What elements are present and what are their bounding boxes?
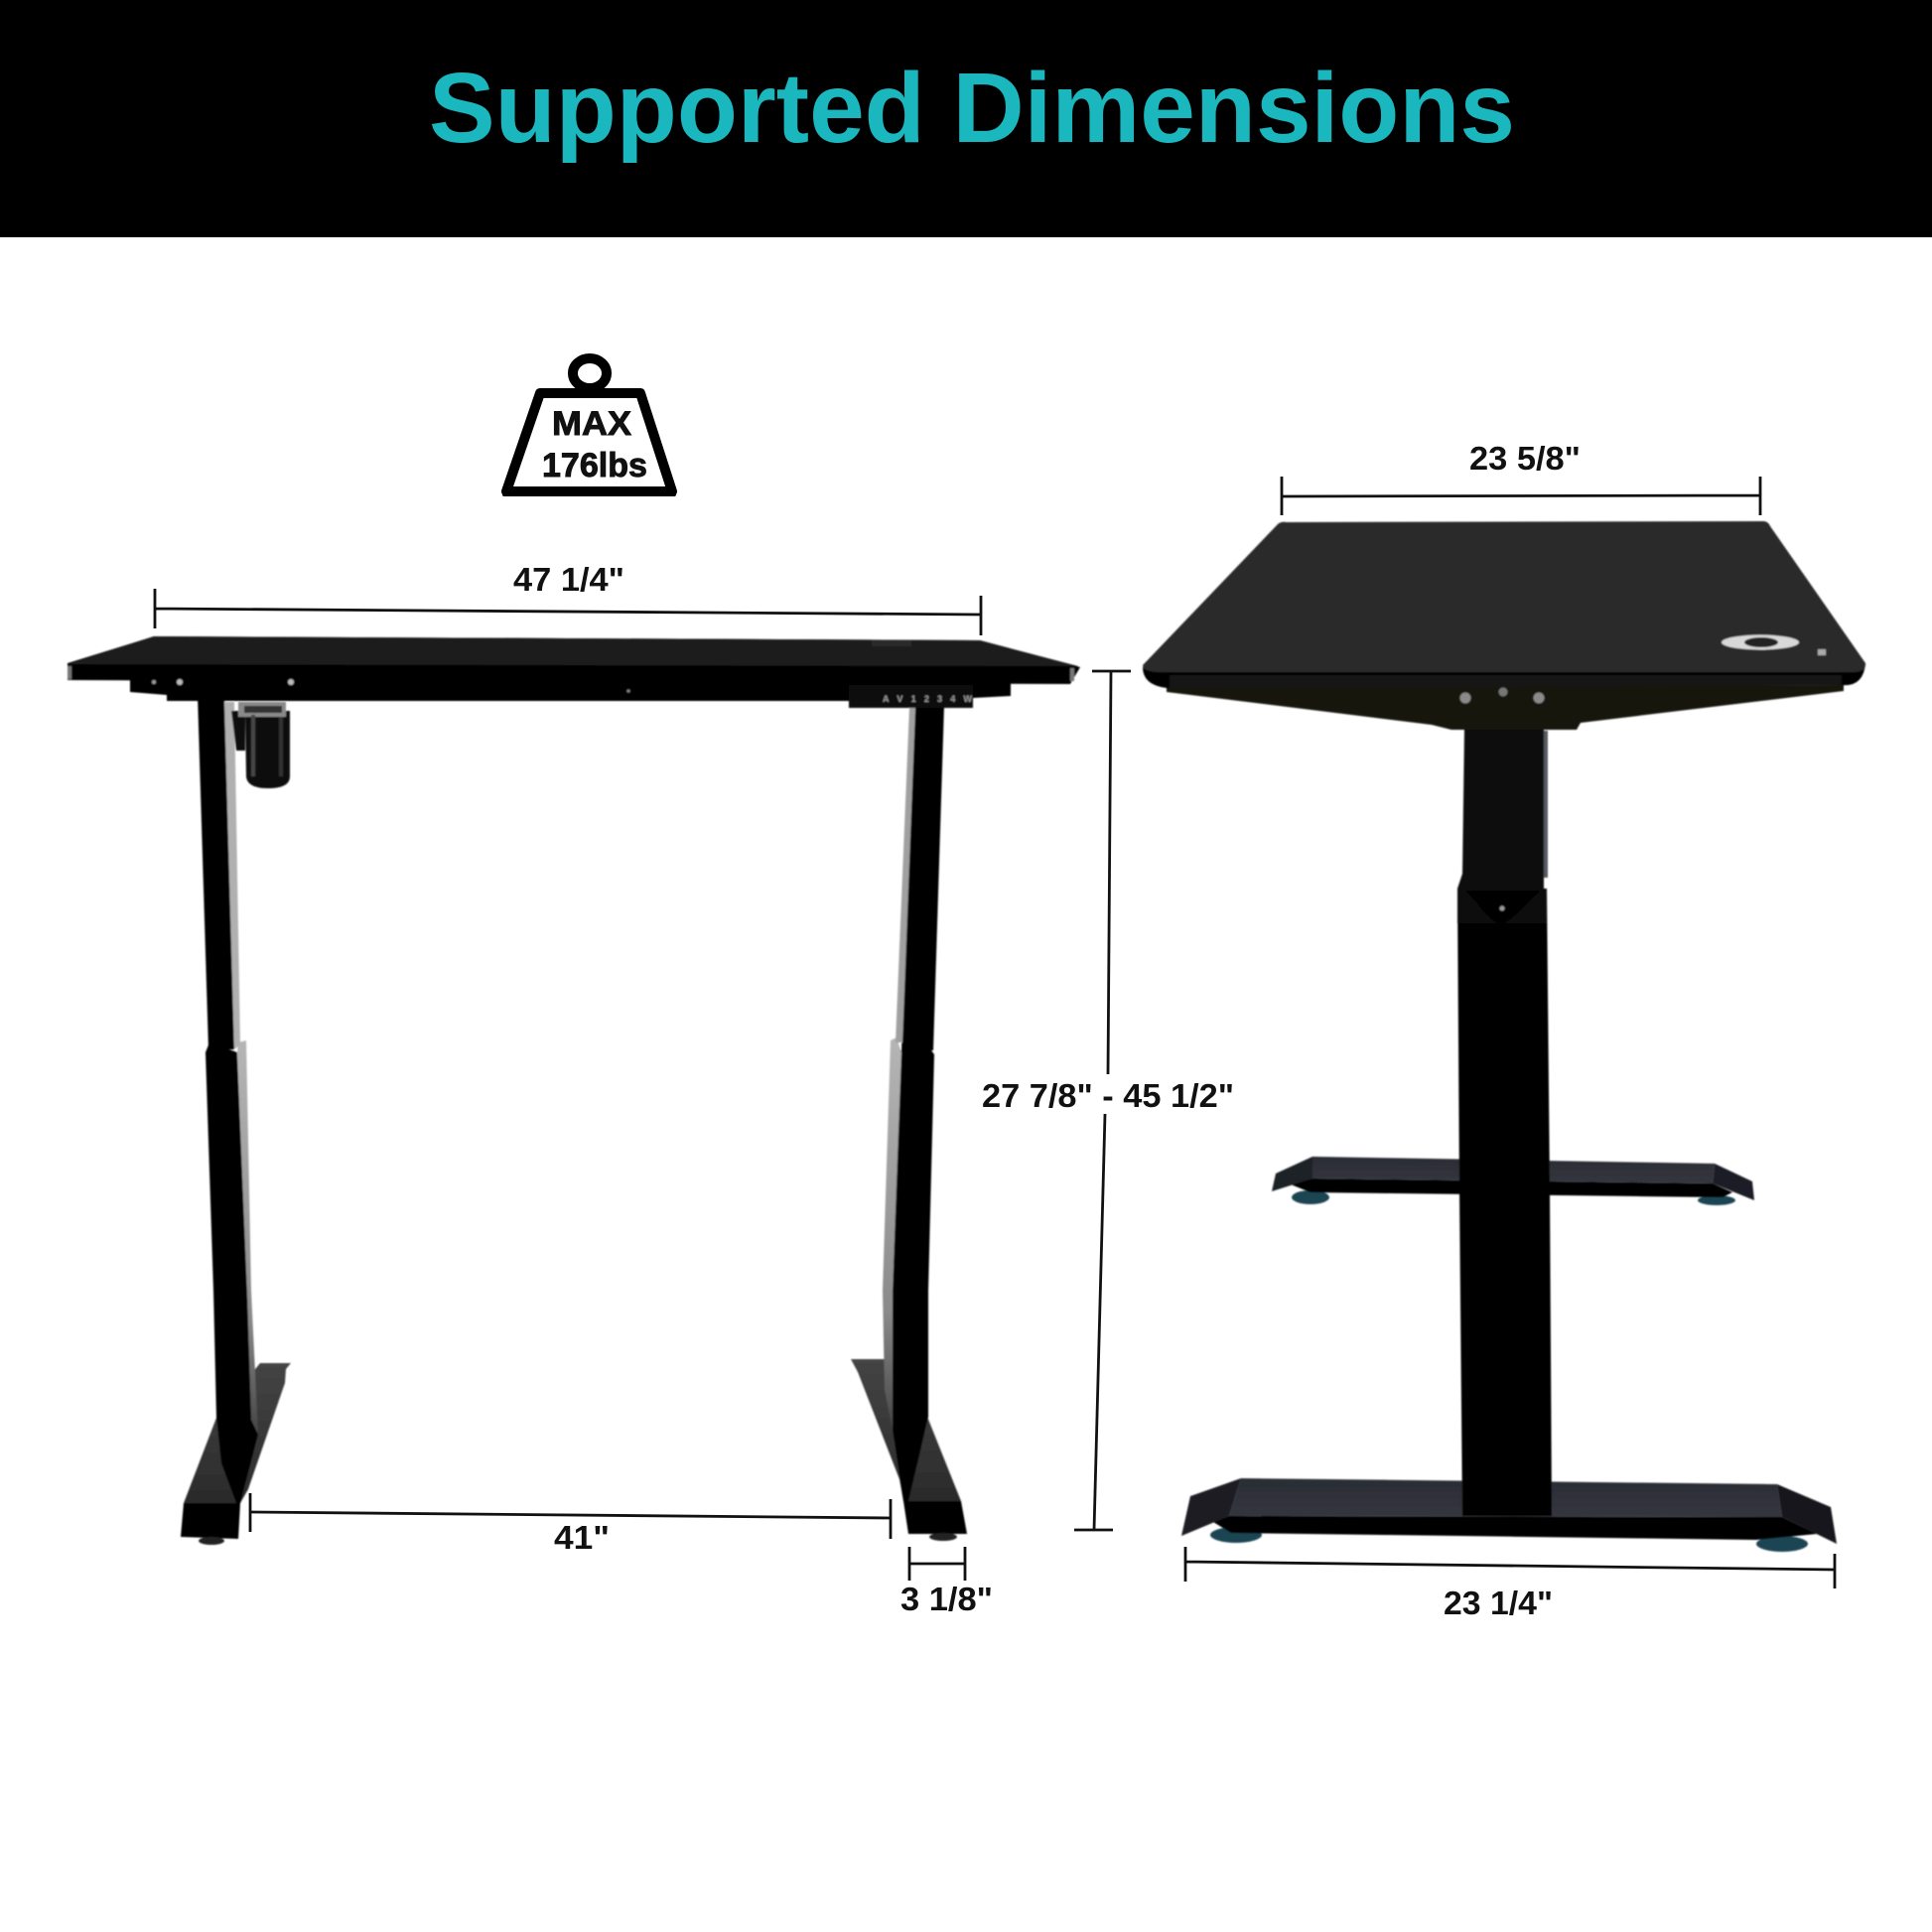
side view desk photo	[1143, 521, 1865, 1552]
near foot	[1181, 1478, 1837, 1552]
front apron and frame	[130, 678, 1011, 708]
weight label: max: MAX	[552, 405, 631, 443]
left leg base plate	[184, 1363, 291, 1503]
side tabletop front edge	[1143, 663, 1865, 688]
label: 23 1/4: 23 1/4"	[1444, 1585, 1553, 1621]
underside bracket	[1167, 685, 1844, 730]
control box	[849, 685, 973, 708]
front view desk photo	[68, 636, 1080, 1545]
label: 47 1/4: 47 1/4"	[513, 561, 624, 598]
motor	[231, 702, 290, 788]
dimension: height range	[982, 671, 1234, 1530]
label: 3 1/8: 3 1/8"	[900, 1581, 993, 1617]
left foot block	[181, 1503, 240, 1539]
title: Supported Dimensions	[429, 53, 1515, 164]
right foot block	[903, 1501, 967, 1534]
dimension: desk depth	[1282, 440, 1760, 515]
side tabletop	[1143, 521, 1865, 672]
label: height range: 27 7/8" - 45 1/2"	[982, 1077, 1234, 1114]
far foot	[1272, 1157, 1754, 1205]
icon: max load weight	[502, 358, 676, 496]
header band	[0, 0, 1932, 237]
cable grommet	[1722, 635, 1799, 649]
dimension: inner leg gap	[250, 1493, 891, 1556]
dimension: base depth	[1185, 1547, 1835, 1621]
label: 23 5/8: 23 5/8"	[1469, 440, 1581, 477]
left upper leg	[198, 695, 234, 1049]
right upper leg	[901, 705, 944, 1050]
dimension: desk width	[155, 561, 981, 635]
dimension: foot width	[900, 1547, 993, 1617]
control box: A V 1 2 3 4 W	[883, 694, 973, 704]
label: 41: 41"	[554, 1519, 610, 1556]
front tabletop	[68, 636, 1080, 684]
left lower leg	[206, 1042, 258, 1503]
side lower leg	[1457, 889, 1552, 1516]
weight label: 176lbs: 176lbs	[542, 447, 647, 484]
right lower leg	[893, 1050, 934, 1501]
side upper leg	[1457, 730, 1544, 889]
leg collar detail	[1457, 889, 1547, 925]
right leg base plate	[851, 1359, 961, 1501]
